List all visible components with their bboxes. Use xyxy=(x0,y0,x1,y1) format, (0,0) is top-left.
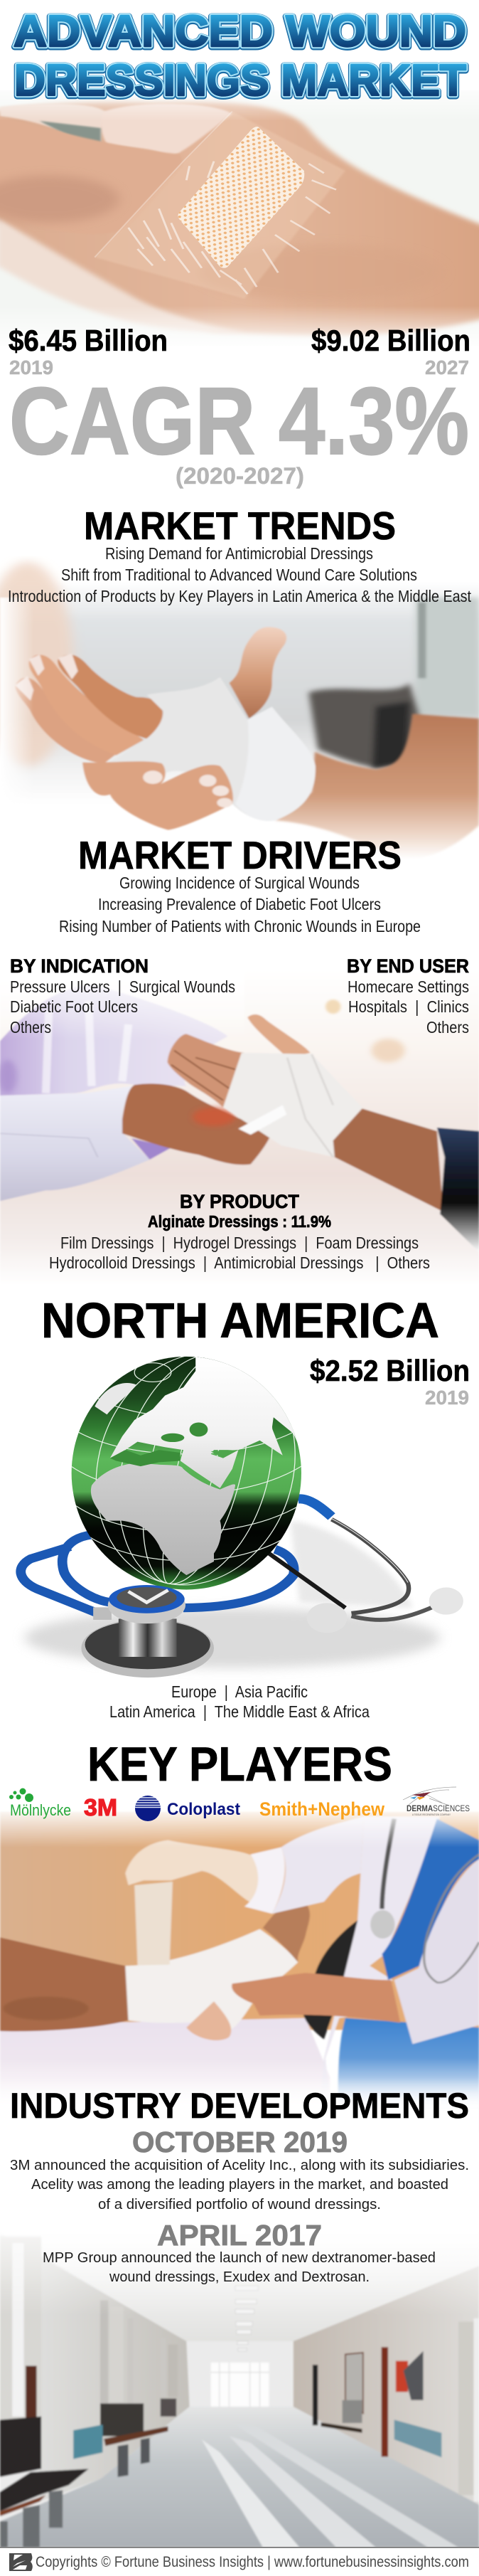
north america xyxy=(41,1293,470,1409)
by indication xyxy=(10,955,235,1037)
by end user xyxy=(347,955,469,1037)
key players heading: KEY PLAYERS xyxy=(87,1737,392,1791)
market drivers: Rising Number of Patients with Chronic Wounds in Europe xyxy=(59,917,421,935)
logo: Molnlycke xyxy=(9,1788,71,1819)
development: october 2019: 3M announced the acquisition of Acelity Inc., along with its subsidiaries. xyxy=(10,2158,469,2173)
logo: Coloplast xyxy=(135,1796,240,1821)
development: october 2019 xyxy=(10,2126,469,2212)
logo: Smith and Nephew: Smith+Nephew xyxy=(259,1798,385,1820)
development: october 2019: OCTOBER 2019 xyxy=(132,2126,348,2158)
logo: Derma Sciences: A TISSUE REGENERATION COMPANY xyxy=(412,1813,451,1816)
other regions: Latin America | The Middle East & Africa xyxy=(109,1702,370,1721)
market drivers xyxy=(59,833,421,935)
market trends: Shift from Traditional to Advanced Wound Care Solutions xyxy=(61,566,417,584)
market size 2019: $6.45 Billion xyxy=(9,324,168,357)
main title: ADVANCED WOUND xyxy=(14,7,466,56)
other regions: Europe | Asia Pacific xyxy=(171,1682,308,1701)
photo: globe with stethoscope xyxy=(21,1337,463,1677)
development: april 2017: MPP Group announced the launch of new dextranomer-based xyxy=(43,2250,436,2266)
photo: foot bandaging xyxy=(0,1807,479,2134)
market drivers: Increasing Prevalence of Diabetic Foot Ulcers xyxy=(98,895,381,913)
market size 2019 xyxy=(9,324,168,378)
development: april 2017 xyxy=(43,2219,436,2285)
north america: 2019 xyxy=(425,1387,469,1409)
north america: $2.52 Billion xyxy=(310,1354,470,1387)
by product: Hydrocolloid Dressings | Antimicrobial Dressings | Others xyxy=(49,1253,430,1272)
by indication: Others xyxy=(10,1018,51,1037)
by product xyxy=(49,1191,430,1272)
development: april 2017: wound dressings, Exudex and Dextrosan. xyxy=(109,2269,370,2285)
globe xyxy=(71,1356,301,1589)
main title: ADVANCED WOUND xyxy=(14,8,466,57)
market size 2027: 2027 xyxy=(425,356,469,378)
shadow under globe xyxy=(24,1608,440,1668)
main title: DRESSINGS MARKET xyxy=(14,56,466,105)
icon: Fortune Business Insights logo xyxy=(9,2553,33,2571)
by indication: BY INDICATION xyxy=(10,955,149,977)
development: october 2019: of a diversified portfolio of wound dressings. xyxy=(98,2197,381,2212)
logo: Coloplast: Coloplast xyxy=(167,1800,240,1819)
market size 2027 xyxy=(311,324,470,378)
main title: ADVANCED WOUND xyxy=(14,7,466,56)
other regions xyxy=(109,1682,370,1721)
market trends: MARKET TRENDS xyxy=(84,504,396,548)
development: april 2017: APRIL 2017 xyxy=(157,2219,322,2252)
development: october 2019: Acelity was among the leading players in the market, and boasted xyxy=(31,2177,448,2193)
by product: Film Dressings | Hydrogel Dressings | Foam Dressings xyxy=(60,1234,419,1252)
footer xyxy=(0,2547,479,2576)
by product: BY PRODUCT xyxy=(180,1191,299,1212)
by indication: Diabetic Foot Ulcers xyxy=(10,997,138,1016)
north america: NORTH AMERICA xyxy=(41,1293,439,1348)
by indication: Pressure Ulcers | Surgical Wounds xyxy=(10,977,235,996)
by end user: Others xyxy=(426,1018,469,1037)
by end user: BY END USER xyxy=(347,955,469,977)
market size 2019: 2019 xyxy=(9,356,53,378)
main title: DRESSINGS MARKET xyxy=(14,57,466,106)
market drivers: MARKET DRIVERS xyxy=(78,833,402,877)
market trends: Rising Demand for Antimicrobial Dressings xyxy=(105,544,373,563)
market drivers: Growing Incidence of Surgical Wounds xyxy=(119,874,360,892)
logo: Derma Sciences: DERMASCIENCES xyxy=(407,1803,470,1813)
photo: doctor bandaging patient hand xyxy=(0,968,479,1286)
logo: 3M: 3M xyxy=(84,1794,117,1820)
logo: Derma Sciences xyxy=(403,1787,470,1816)
photo: hand with wound dressing xyxy=(0,80,479,351)
market trends xyxy=(8,504,472,605)
photo: bandaged wrist xyxy=(0,562,479,859)
main title: DRESSINGS MARKET xyxy=(14,56,466,105)
photo: hospital corridor xyxy=(0,2207,479,2548)
by product: Alginate Dressings : 11.9% xyxy=(148,1212,331,1231)
main title xyxy=(14,7,466,106)
logo: Molnlycke: Mölnlycke xyxy=(10,1801,71,1819)
stethoscope chest piece xyxy=(81,1585,214,1677)
CAGR: (2020-2027) xyxy=(176,463,304,489)
